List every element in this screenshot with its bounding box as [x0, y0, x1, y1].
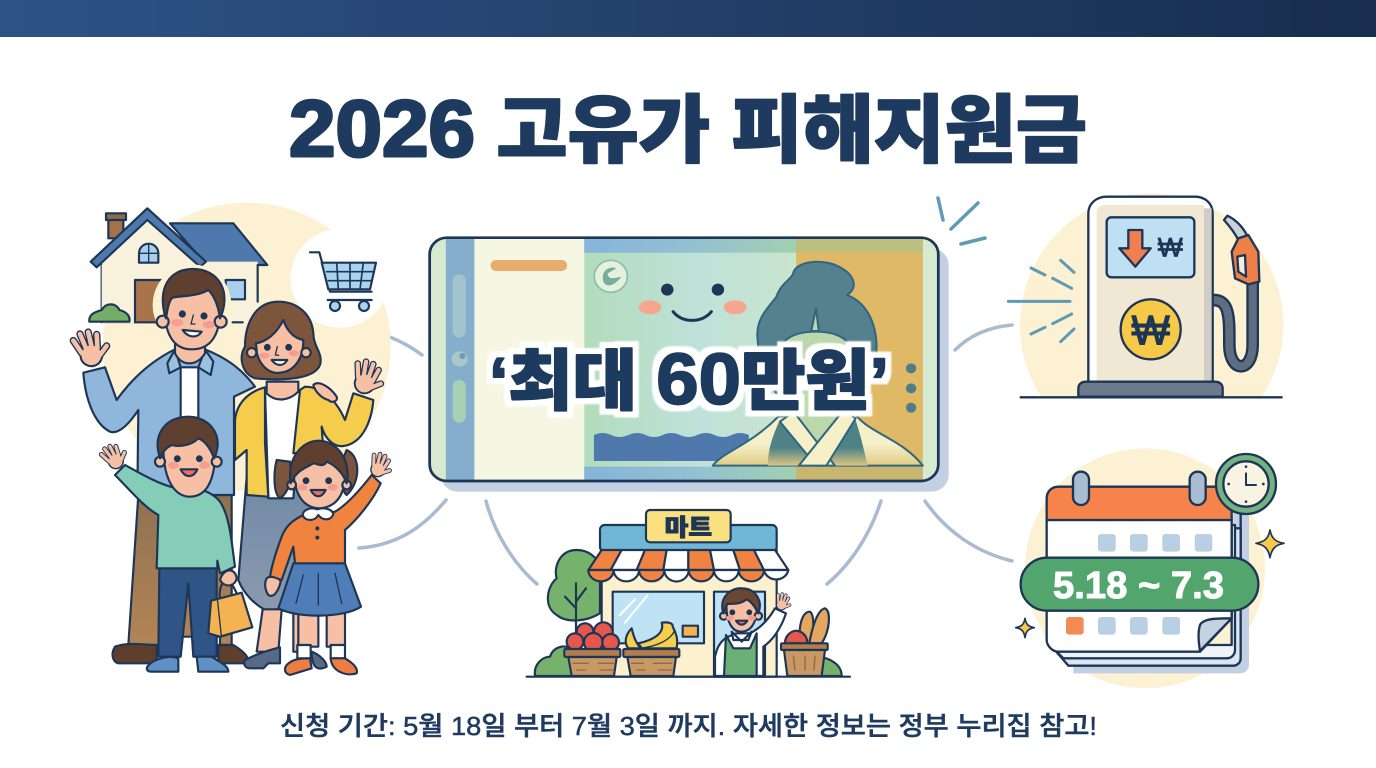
figure: daughter	[265, 441, 393, 675]
tree	[548, 550, 600, 633]
store fascia	[600, 525, 777, 552]
icon: house	[89, 208, 267, 323]
banknote border	[430, 238, 938, 481]
banknote shadow	[441, 248, 949, 492]
title: 2026 고유가 피해지원금	[289, 84, 1087, 173]
amount text: ‘최대 60만원’	[489, 340, 889, 420]
portrait	[713, 262, 923, 466]
top header bar	[0, 0, 1376, 37]
banknote face	[430, 238, 938, 481]
basket left	[564, 649, 620, 676]
page curl	[1199, 618, 1232, 651]
star small	[1016, 618, 1034, 638]
awning	[588, 550, 788, 581]
shop window	[613, 592, 704, 643]
yellow background circle	[1020, 193, 1284, 396]
won coin	[1121, 299, 1181, 359]
sign text: 마트	[665, 508, 712, 542]
icon: gas pump	[1006, 193, 1284, 398]
yellow background circle	[103, 203, 391, 491]
store wall	[602, 550, 777, 677]
icon: calendar	[1016, 448, 1284, 688]
figure: father	[72, 264, 255, 663]
figure: son	[100, 417, 235, 672]
pump body	[1088, 197, 1213, 382]
apples	[567, 622, 619, 652]
price screen	[1107, 217, 1194, 277]
icon: mart storefront	[527, 508, 850, 677]
calendar page	[1047, 520, 1232, 652]
binding rings	[1073, 472, 1089, 505]
date text: 5.18 ~ 7.3	[1053, 565, 1224, 607]
connector lines	[359, 325, 1012, 584]
banknote illustration	[430, 238, 949, 492]
sparkle lines above banknote	[938, 198, 985, 244]
icon: family with house and cart	[72, 203, 393, 675]
star large	[1256, 530, 1284, 558]
icon: down arrow	[1119, 230, 1151, 267]
price tag	[683, 626, 698, 637]
won sign small: ₩	[1158, 232, 1183, 262]
yellow background circle	[1025, 448, 1265, 688]
clock	[1216, 454, 1276, 558]
date pill	[1021, 558, 1258, 611]
hose	[1213, 283, 1253, 366]
bananas	[626, 622, 677, 648]
figure: mother	[235, 302, 385, 669]
basket middle	[623, 649, 679, 676]
icon: shopping bag	[208, 570, 252, 637]
shop door	[714, 592, 765, 677]
pump base	[1078, 382, 1223, 397]
shopkeeper	[715, 588, 792, 676]
date squares	[1066, 534, 1212, 635]
bread and apple	[785, 608, 829, 643]
bushes	[535, 647, 573, 676]
icon: shopping cart	[310, 252, 376, 311]
white circle cut-out	[291, 229, 389, 328]
won sign large: ₩	[1131, 307, 1170, 353]
calendar shadow	[1073, 502, 1249, 673]
calendar header	[1047, 487, 1232, 520]
back pages	[1053, 528, 1241, 666]
store sign	[646, 510, 731, 542]
footer note: 신청 기간: 5월 18일 부터 7월 3일 까지. 자세한 정보는 정부 누리집 참고!	[280, 711, 1097, 741]
ground line	[527, 673, 850, 680]
nozzle	[1224, 216, 1259, 284]
ground line	[1021, 394, 1282, 401]
spray lines	[1008, 260, 1074, 342]
basket right	[781, 643, 828, 676]
